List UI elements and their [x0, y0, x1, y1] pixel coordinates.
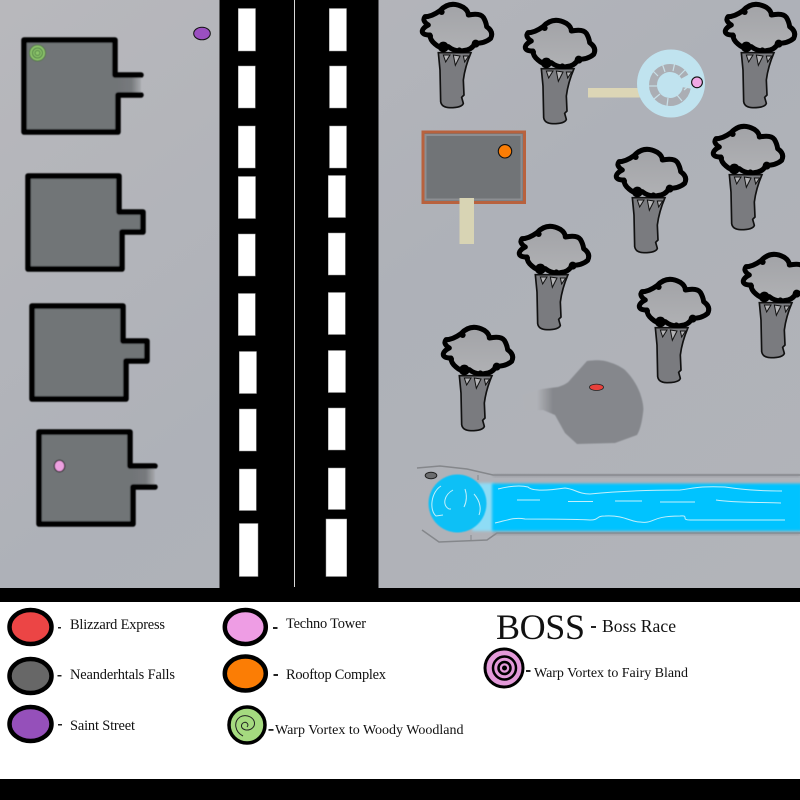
- ground background: [0, 0, 800, 590]
- tree 5: [616, 149, 686, 253]
- boss arena: [522, 360, 643, 444]
- building 3: [32, 306, 147, 399]
- road: [220, 0, 378, 590]
- rooftop complex building: [423, 132, 524, 244]
- circular pool with warp vortex: [588, 50, 705, 118]
- legend: Saint Street: [10, 707, 135, 741]
- tree 8: [743, 254, 800, 358]
- bottom bar: [0, 779, 800, 800]
- legend: Neanderhtals Falls: [10, 659, 175, 693]
- legend: Blizzard Express: [10, 610, 165, 644]
- legend panel: [0, 602, 800, 779]
- legend: Saint Street: Saint Street: [70, 718, 135, 734]
- legend: Warp Vortex to Woody Woodland: [229, 707, 464, 743]
- legend: Neanderhtals Falls: Neanderhtals Falls: [70, 667, 175, 683]
- tree 6: [519, 226, 589, 330]
- marker: Neanderhtals Falls: [425, 472, 437, 479]
- legend: Techno Tower: [225, 610, 366, 644]
- tree 3: [725, 4, 795, 108]
- top legend bar: [0, 588, 800, 602]
- tree 4: [713, 126, 783, 230]
- legend: Rooftop Complex: Rooftop Complex: [286, 667, 387, 683]
- legend: Boss Race: Boss Race: [602, 616, 676, 636]
- building 4 with pink marker: [39, 432, 155, 524]
- tree 9: [443, 327, 513, 431]
- legend: Warp Vortex to Fairy Bland: Warp Vortex to Fairy Bland: [534, 666, 688, 681]
- legend: Boss Race: BOSS: [496, 607, 585, 647]
- marker: Saint Street: [194, 27, 210, 40]
- legend: Rooftop Complex: [225, 656, 387, 690]
- tree 7: [639, 279, 709, 383]
- building 2: [28, 176, 143, 269]
- tree 2: [525, 20, 595, 124]
- legend: Boss Race: [496, 607, 676, 647]
- building 1 with green warp vortex: [24, 40, 141, 132]
- legend: Techno Tower: Techno Tower: [286, 616, 366, 632]
- legend: Warp Vortex to Woody Woodland: Warp Vortex to Woody Woodland: [275, 723, 464, 738]
- tree 1: [422, 4, 492, 108]
- legend: Warp Vortex to Fairy Bland: [485, 649, 688, 687]
- legend: Blizzard Express: Blizzard Express: [70, 617, 165, 633]
- river and warp waterfall: [417, 466, 800, 542]
